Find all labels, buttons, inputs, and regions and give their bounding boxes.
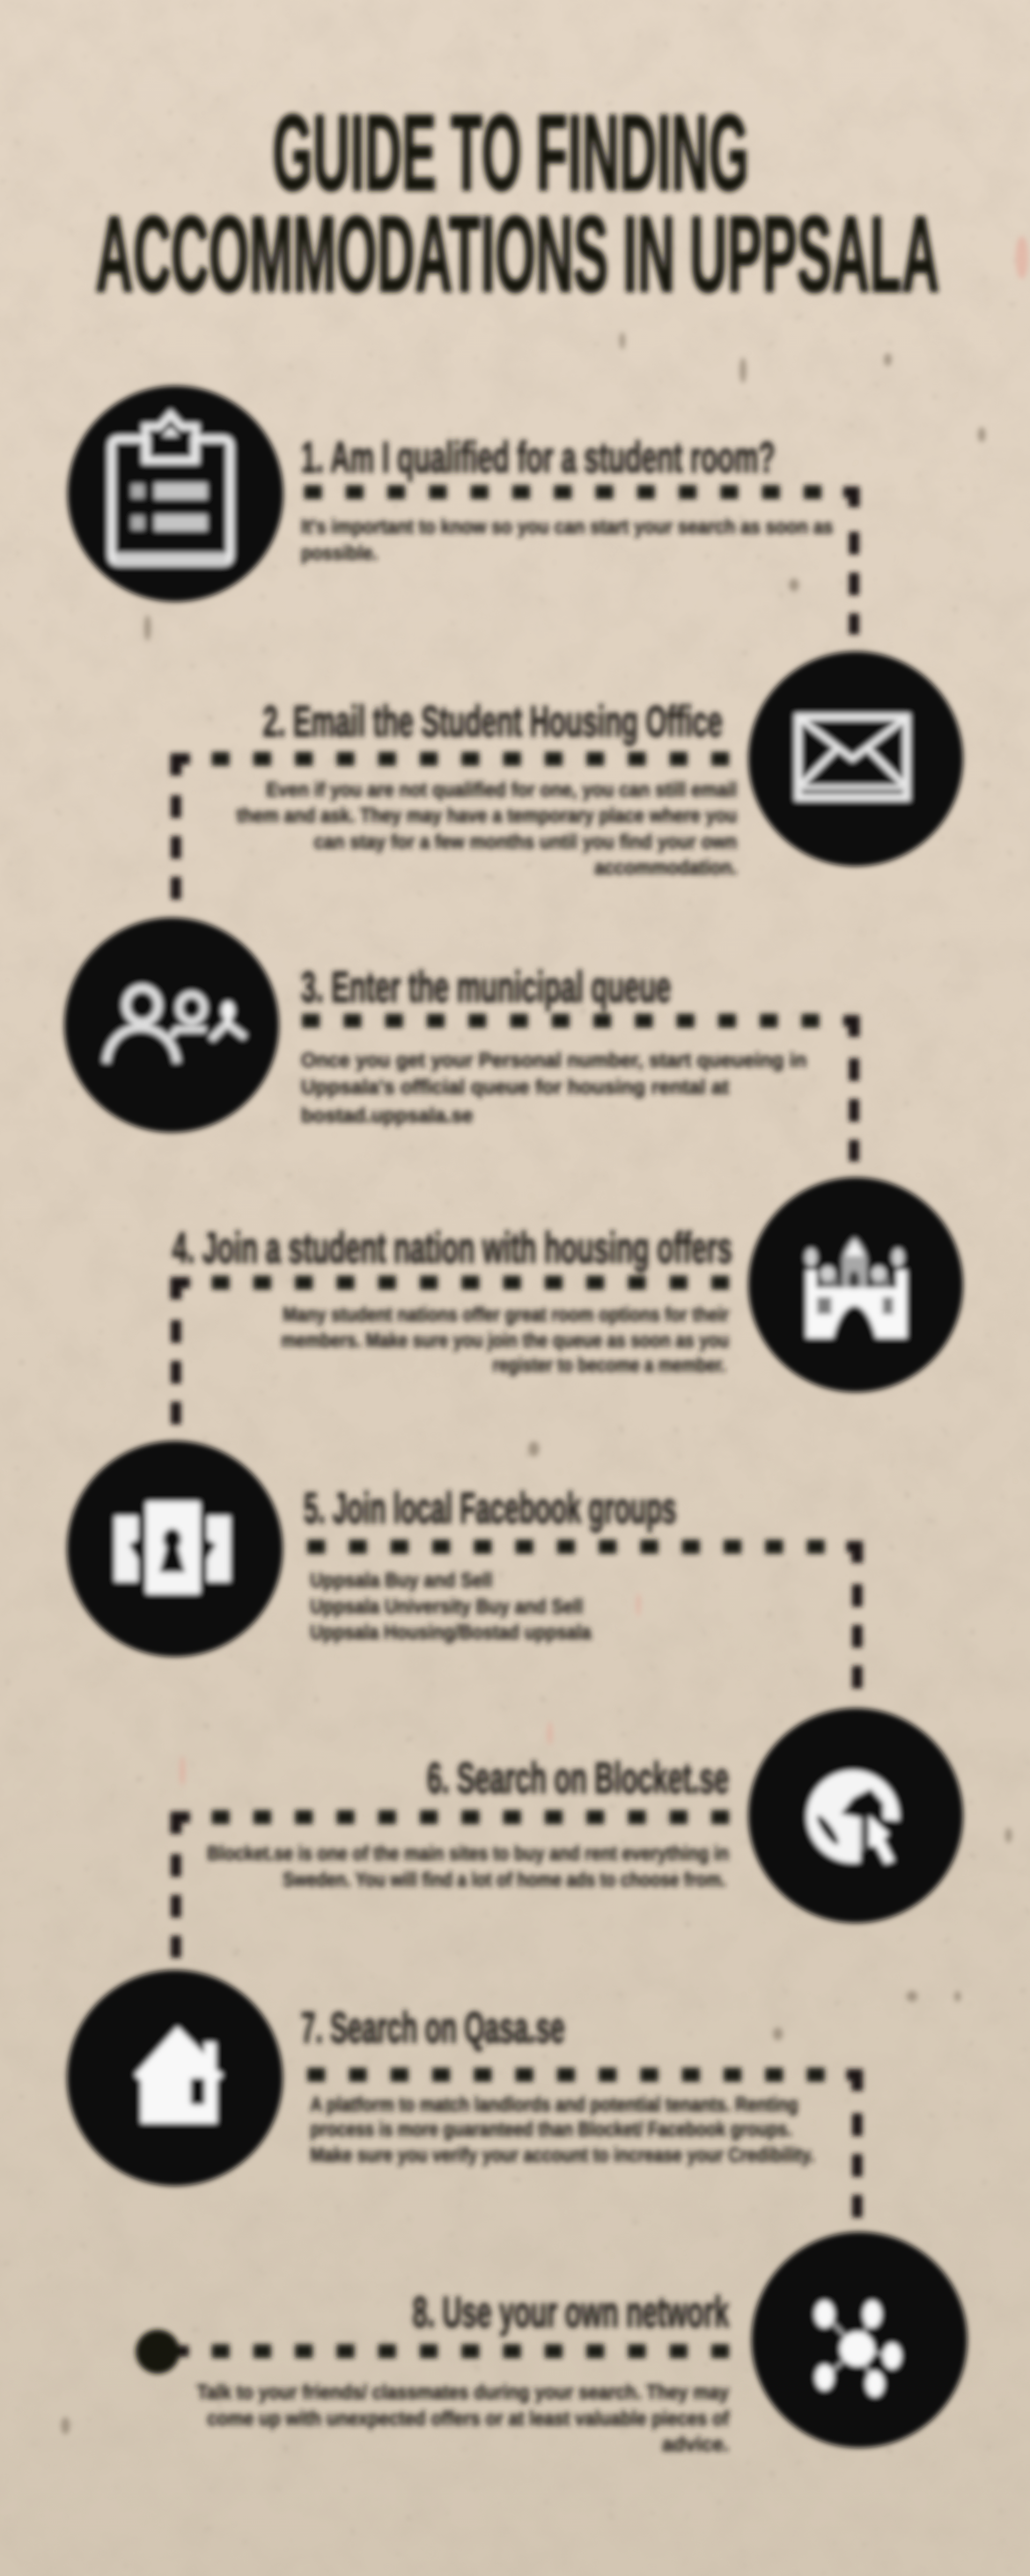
connector 1 (304, 492, 854, 634)
step 3: text: Once you get your Personal number, start queueing in (301, 1049, 807, 1072)
step 1: circle and clipboard icon (68, 386, 283, 602)
step 1: text (301, 433, 833, 565)
connector 4 (176, 1283, 729, 1425)
step 4: text: members. Make sure you join the queue as soon as you (281, 1329, 729, 1352)
step 5: text (304, 1484, 676, 1644)
step 8: text (197, 2288, 729, 2456)
step 1: text: possible. (301, 542, 378, 565)
step 8: text: advice. (662, 2433, 729, 2456)
step 5: text: Uppsala Housing/Bostad uppsala (310, 1621, 592, 1644)
connector 2 (176, 759, 729, 901)
step 4: circle and castle icon (748, 1177, 963, 1392)
step 5: text: 5. Join local Facebook groups (304, 1484, 676, 1533)
step 6: text: Sweden. You will find a lot of home ads to choose from. (283, 1869, 726, 1891)
step 5: text: Uppsala University Buy and Sell (310, 1596, 583, 1618)
step 2: text: them and ask. They may have a temporary place where you (237, 804, 737, 827)
step 7: text: A platform to match landlords and potential tenants. Renting (310, 2094, 798, 2116)
step 3: text (301, 963, 807, 1127)
step 2: text: accommodation. (594, 857, 737, 879)
step 7: text (301, 2003, 814, 2167)
connector 7 (307, 2075, 857, 2218)
step 1: text: It's important to know so you can start your search as soon as (301, 516, 833, 538)
step 3: circle and people icon (64, 918, 279, 1132)
step 6: text: Blocket.se is one of the main sites to buy and rent everything in (207, 1842, 729, 1865)
step 3: text: 3. Enter the municipal queue (301, 963, 671, 1012)
step 7: text: Make sure you verify your account to increase your Credibility. (310, 2144, 814, 2167)
title (95, 92, 939, 314)
step 8: text: Talk to your friends/ classmates during your search. They may (197, 2381, 729, 2404)
connector 8 with end dot (136, 2330, 729, 2374)
step 7: text: 7. Search on Qasa.se (301, 2003, 565, 2052)
step 4: text: register to become a member. (492, 1354, 726, 1377)
step 4: text (172, 1224, 732, 1377)
step 7: text: process is more guaranteed than Blocket/ Facebook groups. (310, 2118, 792, 2141)
connector 3 (302, 1021, 854, 1161)
step 6: text: 6. Search on Blocket.se (427, 1754, 729, 1803)
step 3: text: bostad.uppsala.se (301, 1104, 473, 1127)
step 8: text: come up with unexpected offers or at least valuable pieces of (207, 2407, 729, 2430)
step 8: text: 8. Use your own network (413, 2288, 729, 2337)
step 4: text: Many student nations offer great room options for their (283, 1304, 729, 1326)
step 2: text (237, 697, 737, 879)
connector 5 (307, 1547, 857, 1688)
step 2: text: Even if you are not qualified for one, you can still email (266, 779, 737, 801)
step 5: circle and contact icon (67, 1441, 283, 1657)
step 2: text: 2. Email the Student Housing Office (263, 697, 723, 746)
step 7: circle and house icon (67, 1970, 283, 2186)
step 2: circle and envelope icon (748, 652, 963, 866)
step 6: text (207, 1754, 729, 1891)
step 6: circle and globe cursor icon (748, 1708, 963, 1923)
connector 6 (176, 1817, 729, 1958)
step 5: text: Uppsala Buy and Sell (310, 1569, 492, 1592)
step 2: text: can stay for a few months until you find your own (314, 831, 737, 853)
step 8: circle and network icon (752, 2232, 967, 2448)
step 3: text: Uppsala's official queue for housing rental at (301, 1076, 729, 1099)
